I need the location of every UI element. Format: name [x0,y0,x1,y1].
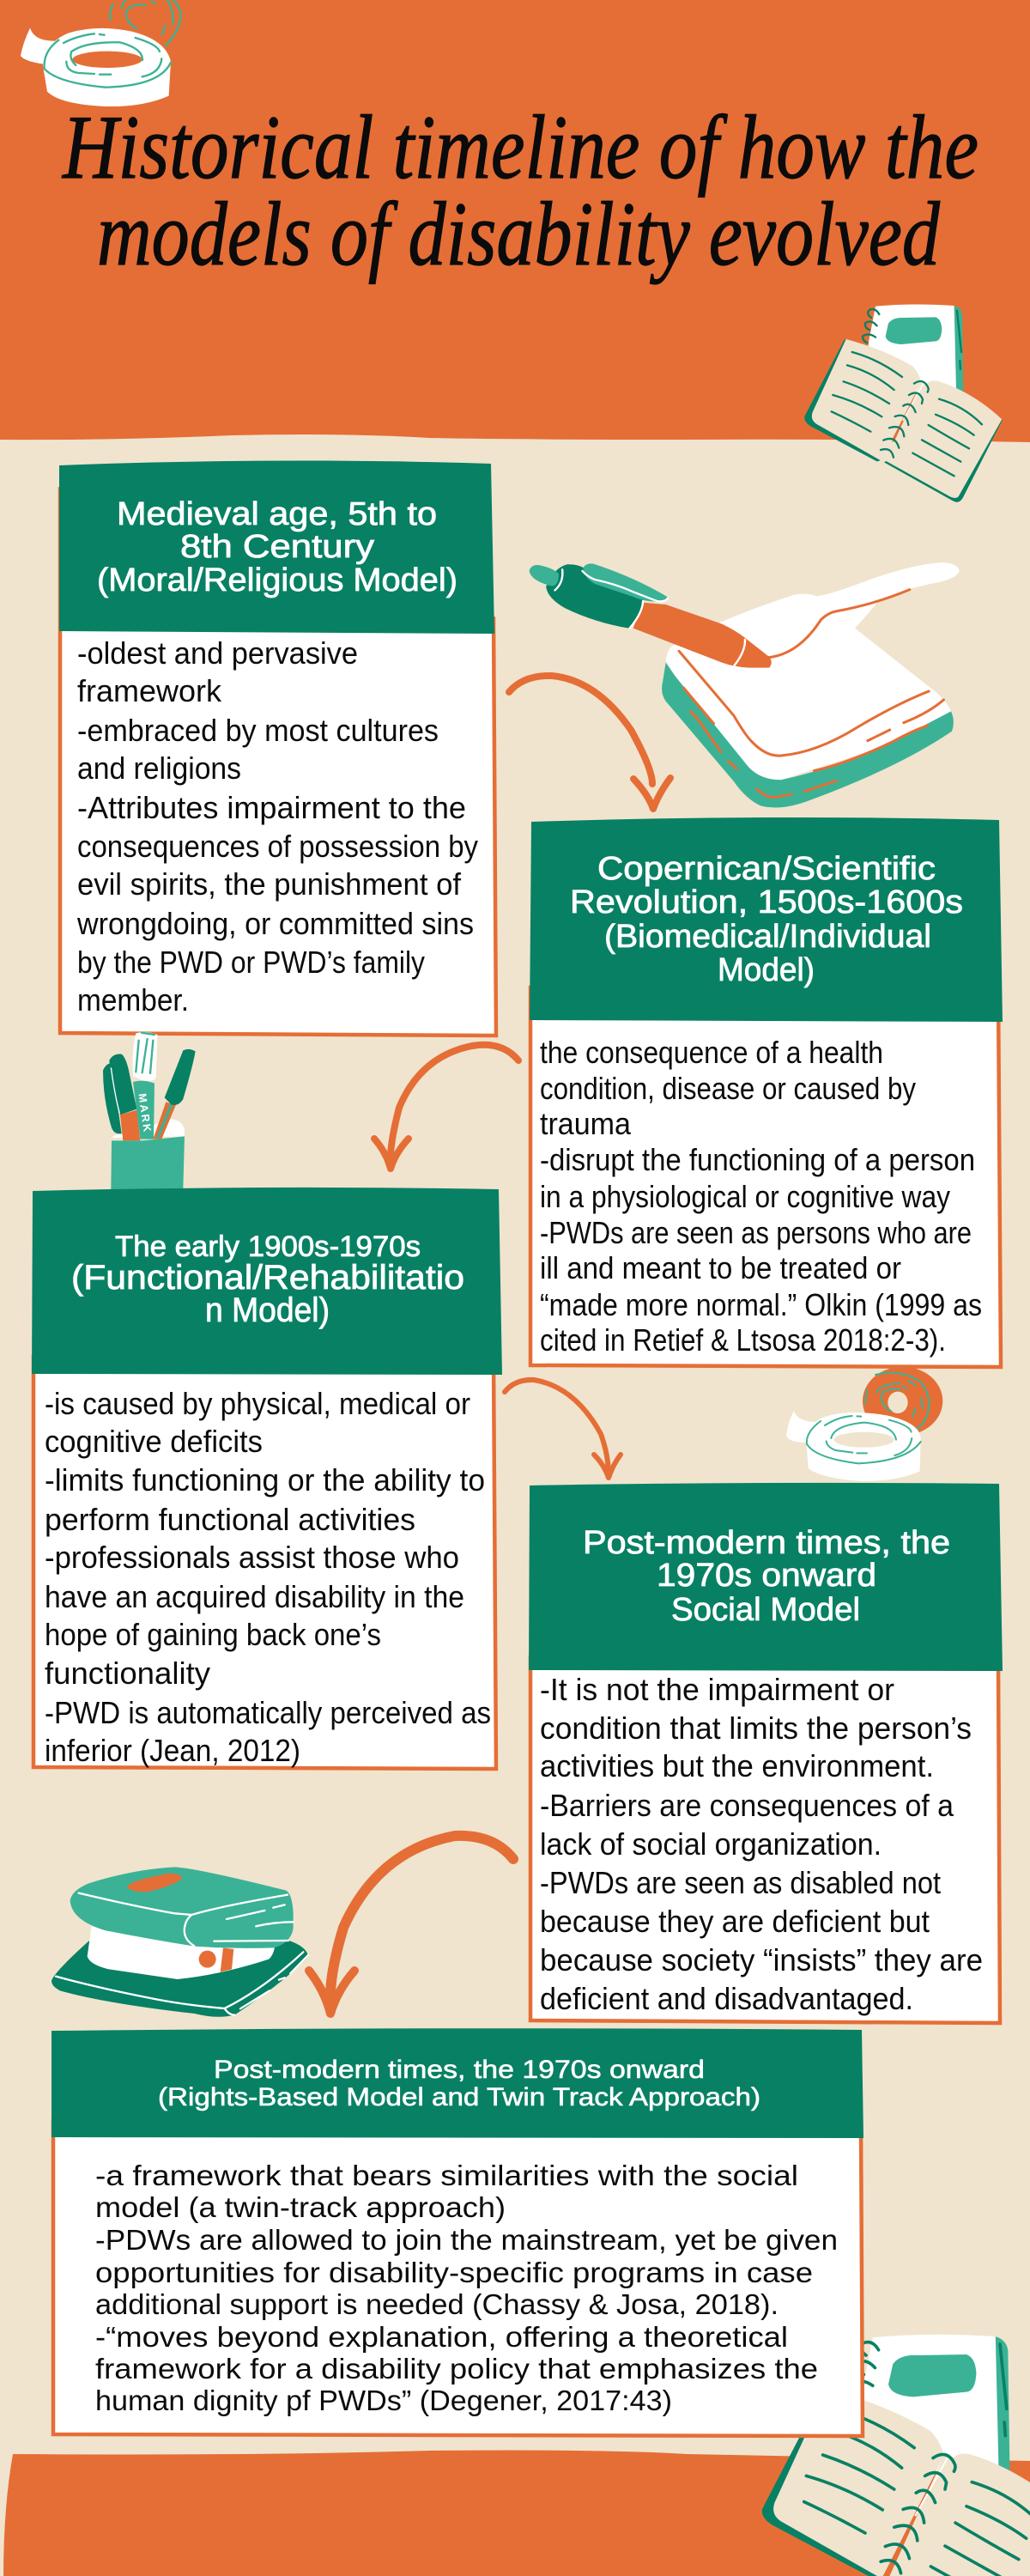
text: functional body: -professionals assist those who [45,1540,459,1575]
panel: functional [32,1188,502,1769]
arrow: medieval to scientific [509,676,670,809]
text: rights-based body: -PDWs are allowed to join the mainstream, yet be given [95,2224,838,2256]
header: medieval: (Moral/Religious Model) [97,562,457,598]
header: medieval: Medieval age, 5th to [117,496,437,532]
icon: pens in cup: MARK [136,1092,154,1134]
text: scientific body: ill and meant to be treated or [540,1250,901,1285]
text: rights-based body: -“moves beyond explanation, offering a theoretical [95,2321,788,2353]
header: medieval: 8th Century [180,529,374,565]
text: medieval body: evil spirits, the punishment of [77,866,462,902]
header: rights-based: (Rights-Based Model and Twin Track Approach) [158,2083,760,2111]
text: medieval body: -oldest and pervasive [77,635,358,671]
text: rights-based body: additional support is needed (Chassy & Josa, 2018). [95,2288,779,2320]
header: social: 1970s onward [657,1558,876,1594]
text: functional body: functionality [45,1656,210,1691]
text: scientific body: cited in Retief & Ltsosa 2018:2-3). [540,1322,946,1358]
text: social body: condition that limits the person’s [540,1710,972,1746]
header: functional: (Functional/Rehabilitatio [71,1259,464,1297]
text: rights-based body: -a framework that bears similarities with the social [95,2160,798,2191]
header: scientific: Revolution, 1500s-1600s [570,884,963,920]
text: social body: because they are deficient but [540,1904,930,1939]
text: rights-based body [95,2160,838,2416]
panel: social [529,1483,1003,2023]
text: functional body: -limits functioning or the ability to [45,1462,485,1498]
text: medieval body: and religions [77,750,241,786]
icon: pens in cup [103,1032,196,1189]
top orange banner [0,0,1030,442]
text: rights-based body: opportunities for disability-specific programs in case [95,2257,813,2288]
text: social body: -PWDs are seen as disabled not [540,1865,941,1900]
text: functional body: perform functional activities [45,1502,415,1537]
text: functional body [45,1386,491,1768]
text: rights-based body: framework for a disability policy that emphasizes the [95,2353,818,2385]
text: social body: because society “insists” they are [540,1942,983,1978]
header: medieval [59,460,494,634]
text: scientific body: in a physiological or cognitive way [540,1179,950,1214]
panel: scientific [530,817,1003,1367]
arrow: social to rights-based [309,1836,513,2014]
icon: pen and paper [530,562,960,808]
text: medieval body: framework [77,673,222,708]
text: scientific body: -PWDs are seen as persons who are [540,1215,972,1250]
header: social: Social Model [671,1592,860,1628]
text: functional body: hope of gaining back one’s [45,1617,381,1652]
header: scientific [530,817,1003,1022]
icon: stack of books [52,1867,308,2017]
bottom orange banner [3,2451,1030,2576]
text: functional body: have an acquired disability in the [45,1579,464,1614]
header: social: Post-modern times, the [583,1525,950,1561]
header: scientific: Copernican/Scientific [597,851,936,887]
header: scientific: (Biomedical/Individual [604,919,931,955]
header: rights-based: Post-modern times, the 1970s onward [214,2056,705,2084]
text: scientific body: the consequence of a health [540,1035,883,1070]
text: social body: lack of social organization. [540,1826,882,1862]
header: scientific: Model) [718,952,815,988]
text: medieval body: consequences of possession by [77,829,478,864]
text: functional body: -is caused by physical, medical or [45,1386,470,1421]
text: scientific body: condition, disease or caused by [540,1071,916,1106]
text: medieval body: -Attributes impairment to the [77,790,466,825]
text: social body: activities but the environment. [540,1748,934,1783]
icon: notebook bottom right [762,2335,1030,2576]
text: scientific body [540,1035,982,1358]
header: rights-based [52,2028,863,2138]
text: scientific body: trauma [540,1106,632,1141]
text: social body: deficient and disadvantaged. [540,1981,913,2016]
header: functional: The early 1900s-1970s [115,1230,421,1263]
text: medieval body: member. [77,982,189,1018]
text: medieval body [76,635,478,1018]
text: functional body: inferior (Jean, 2012) [45,1733,300,1768]
text: scientific body: -disrupt the functioning of a person [540,1142,975,1177]
text: social body: -Barriers are consequences of a [540,1788,954,1823]
icon: tape roll middle [786,1367,942,1481]
arrow: functional to social [505,1380,621,1478]
text: functional body: cognitive deficits [45,1424,263,1459]
header: functional [32,1188,502,1375]
header: functional: n Model) [205,1291,330,1329]
title [61,97,978,284]
text: medieval body: wrongdoing, or committed sins [76,906,474,941]
panel: rights-based [52,2028,863,2436]
text: scientific body: “made more normal.” Olkin (1999 as [540,1287,982,1322]
text: social body: -It is not the impairment or [540,1672,894,1707]
text: medieval body: -embraced by most cultures [77,713,439,748]
icon: tape roll top left [21,0,180,106]
text: rights-based body: human dignity pf PWDs” (Degener, 2017:43) [95,2385,672,2416]
text: functional body: -PWD is automatically perceived as [45,1695,491,1730]
text: medieval body: by the PWD or PWD’s family [77,945,425,980]
arrow: scientific to functional [374,1045,518,1169]
header: social [529,1483,1003,1671]
icon: notebook top right [804,304,1003,502]
panel: medieval [59,460,496,1036]
text: social body [540,1672,983,2016]
text: rights-based body: model (a twin-track approach) [95,2191,506,2223]
